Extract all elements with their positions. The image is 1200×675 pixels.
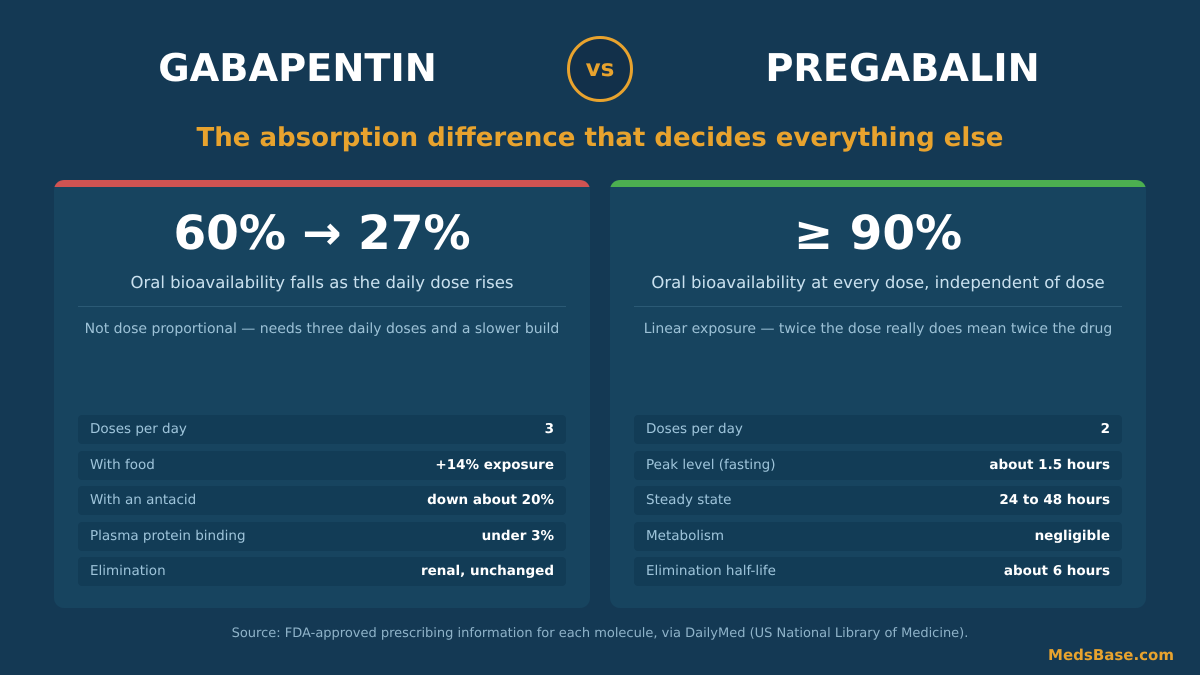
row: doses per day: Doses per day (646, 421, 743, 437)
row: with an antacid: down about 20% (427, 492, 554, 508)
row: elimination half-life: about 6 hours (1004, 563, 1110, 579)
row: doses per day: 3 (545, 421, 554, 437)
source line: Source: FDA-approved prescribing information for each molecule, via DailyMed (US National Library of Medicine). (232, 626, 968, 641)
row: metabolism: negligible (1035, 528, 1110, 544)
title: gabapentin: GABAPENTIN (158, 46, 437, 91)
row: doses per day (634, 415, 1122, 444)
accent bar: green (610, 180, 1146, 187)
row: with an antacid (78, 486, 566, 515)
vs badge: vs (586, 56, 614, 82)
row: plasma protein binding (78, 522, 566, 550)
row: steady state: Steady state (646, 492, 732, 508)
description: gabapentin: Oral bioavailability falls as the daily dose rises (130, 273, 514, 292)
row: steady state: 24 to 48 hours (999, 492, 1110, 508)
row: elimination: Elimination (90, 563, 166, 579)
row: elimination half-life (634, 557, 1122, 586)
row: metabolism (634, 522, 1122, 550)
accent bar: red (54, 180, 590, 187)
row: doses per day: 2 (1101, 421, 1110, 437)
panel: pregabalin (610, 180, 1146, 608)
row: elimination: renal, unchanged (421, 563, 554, 579)
row: peak level: Peak level (fasting) (646, 456, 776, 472)
row: doses per day: Doses per day (90, 421, 187, 437)
row: plasma protein binding: Plasma protein binding (90, 528, 246, 544)
row: doses per day (78, 415, 566, 444)
description: pregabalin: Oral bioavailability at every dose, independent of dose (651, 273, 1105, 292)
note: pregabalin: Linear exposure — twice the dose really does mean twice the drug (644, 321, 1112, 337)
big stat: gabapentin bioavailability: 60% → 27% (173, 206, 471, 261)
vs badge (567, 36, 633, 102)
row: with food (78, 450, 566, 480)
row: metabolism: Metabolism (646, 528, 724, 544)
panel: gabapentin (54, 180, 590, 608)
subtitle: The absorption difference that decides everything else (197, 123, 1003, 153)
row: plasma protein binding: under 3% (482, 528, 554, 544)
big stat: pregabalin bioavailability: ≥ 90% (794, 206, 962, 261)
row: peak level: about 1.5 hours (989, 456, 1110, 472)
note: gabapentin: Not dose proportional — needs three daily doses and a slower build (85, 321, 559, 337)
row: with food: +14% exposure (435, 456, 554, 472)
row: elimination (78, 557, 566, 586)
row: elimination half-life: Elimination half-life (646, 563, 776, 579)
brand: MedsBase.com (1048, 646, 1174, 664)
row: steady state (634, 486, 1122, 515)
row: peak level (634, 450, 1122, 480)
row: with an antacid: With an antacid (90, 492, 196, 508)
row: with food: With food (90, 456, 155, 472)
title: pregabalin: PREGABALIN (765, 46, 1040, 91)
